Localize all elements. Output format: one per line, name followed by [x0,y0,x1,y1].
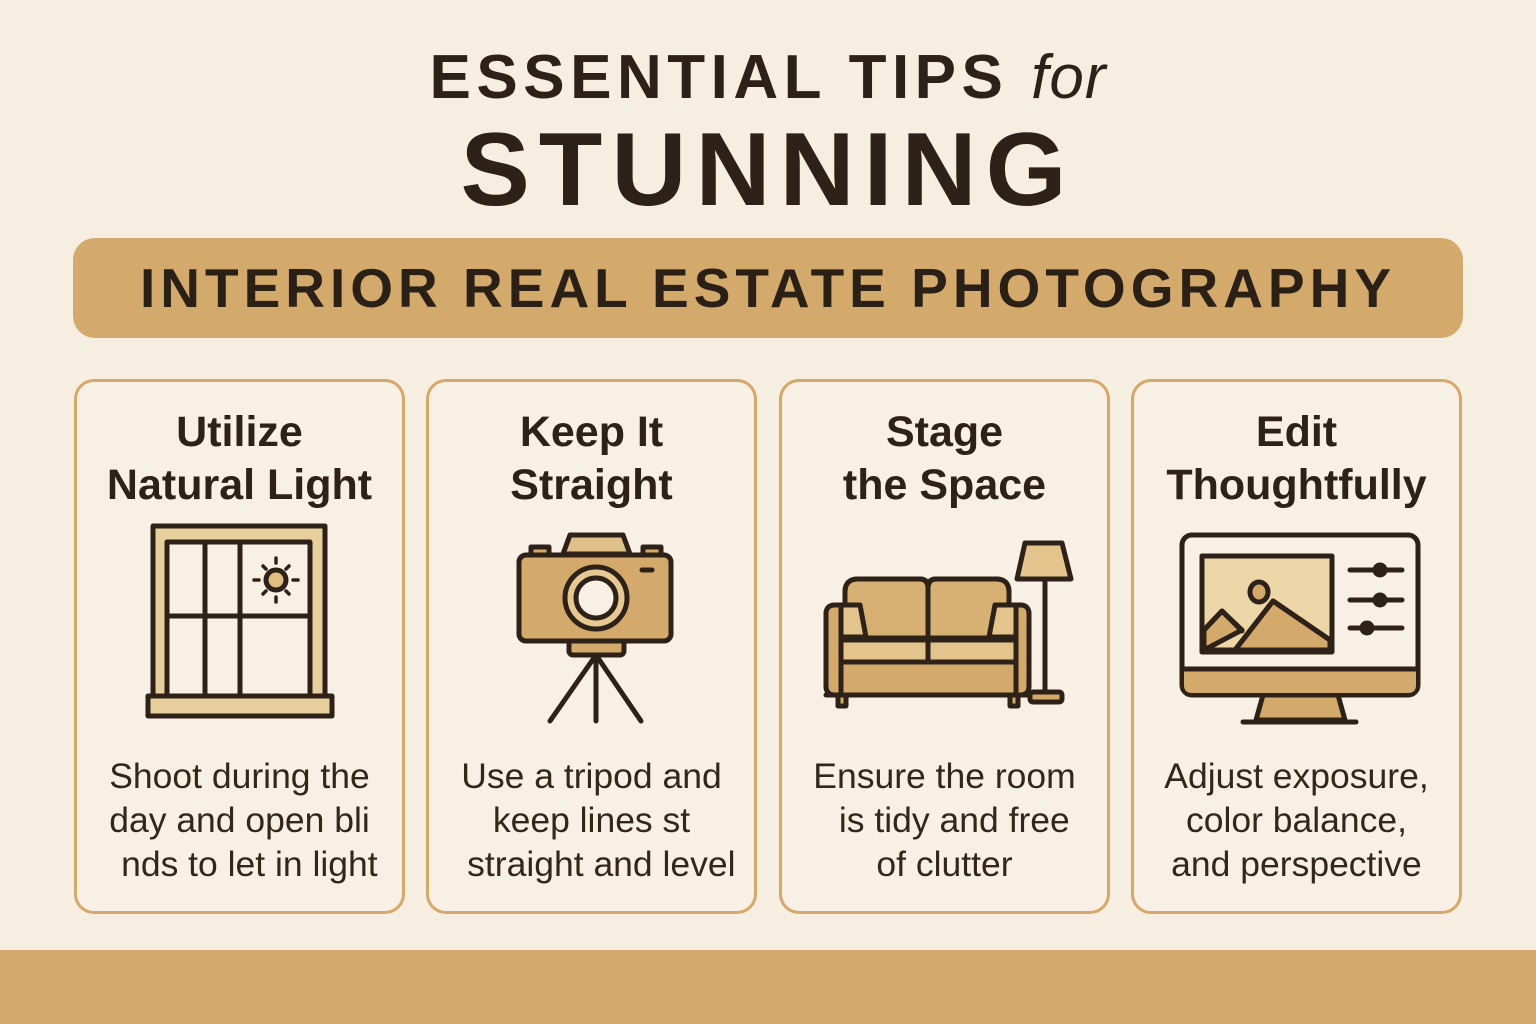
heading: Keep It [520,408,663,456]
description [109,756,378,884]
description: keep lines st [493,800,690,840]
banner: subtitle: INTERIOR REAL ESTATE PHOTOGRAPHY [140,257,1396,319]
heading [107,408,372,509]
description: day and open bli [109,800,370,840]
heading: Edit [1256,408,1337,456]
heading: Straight [510,461,673,509]
heading: Thoughtfully [1166,461,1427,509]
description: nds to let in light [121,844,378,884]
heading: Natural Light [107,461,372,509]
heading [510,408,673,509]
heading: Utilize [176,408,303,456]
description: and perspective [1171,844,1422,884]
description: color balance, [1186,800,1407,840]
icon: monitor with photo and sliders [1180,532,1420,724]
title line 1: ESSENTIAL TIPS for [430,43,1106,112]
banner: subtitle [73,238,1463,338]
description: Shoot during the [109,756,370,796]
description: Use a tripod and [461,756,722,796]
heading: the Space [843,461,1046,509]
panel: natural light [74,379,405,914]
description: of clutter [876,844,1013,884]
heading [843,408,1046,509]
icon: sofa and lamp [824,540,1074,708]
description: is tidy and free [839,800,1070,840]
footer band [0,950,1536,1024]
description: Ensure the room [813,756,1076,796]
panel: edit thoughtfully [1131,379,1462,914]
icon: window with sun [146,524,334,718]
description: Adjust exposure, [1164,756,1429,796]
heading: Stage [886,408,1003,456]
panel: stage the space [779,379,1110,914]
description [1164,756,1429,884]
description: straight and level [467,844,736,884]
title line 2: STUNNING [460,112,1076,228]
icon: camera on tripod [516,532,674,724]
heading [1166,408,1427,509]
description [813,756,1076,884]
description [461,756,736,884]
panel: keep straight [426,379,757,914]
